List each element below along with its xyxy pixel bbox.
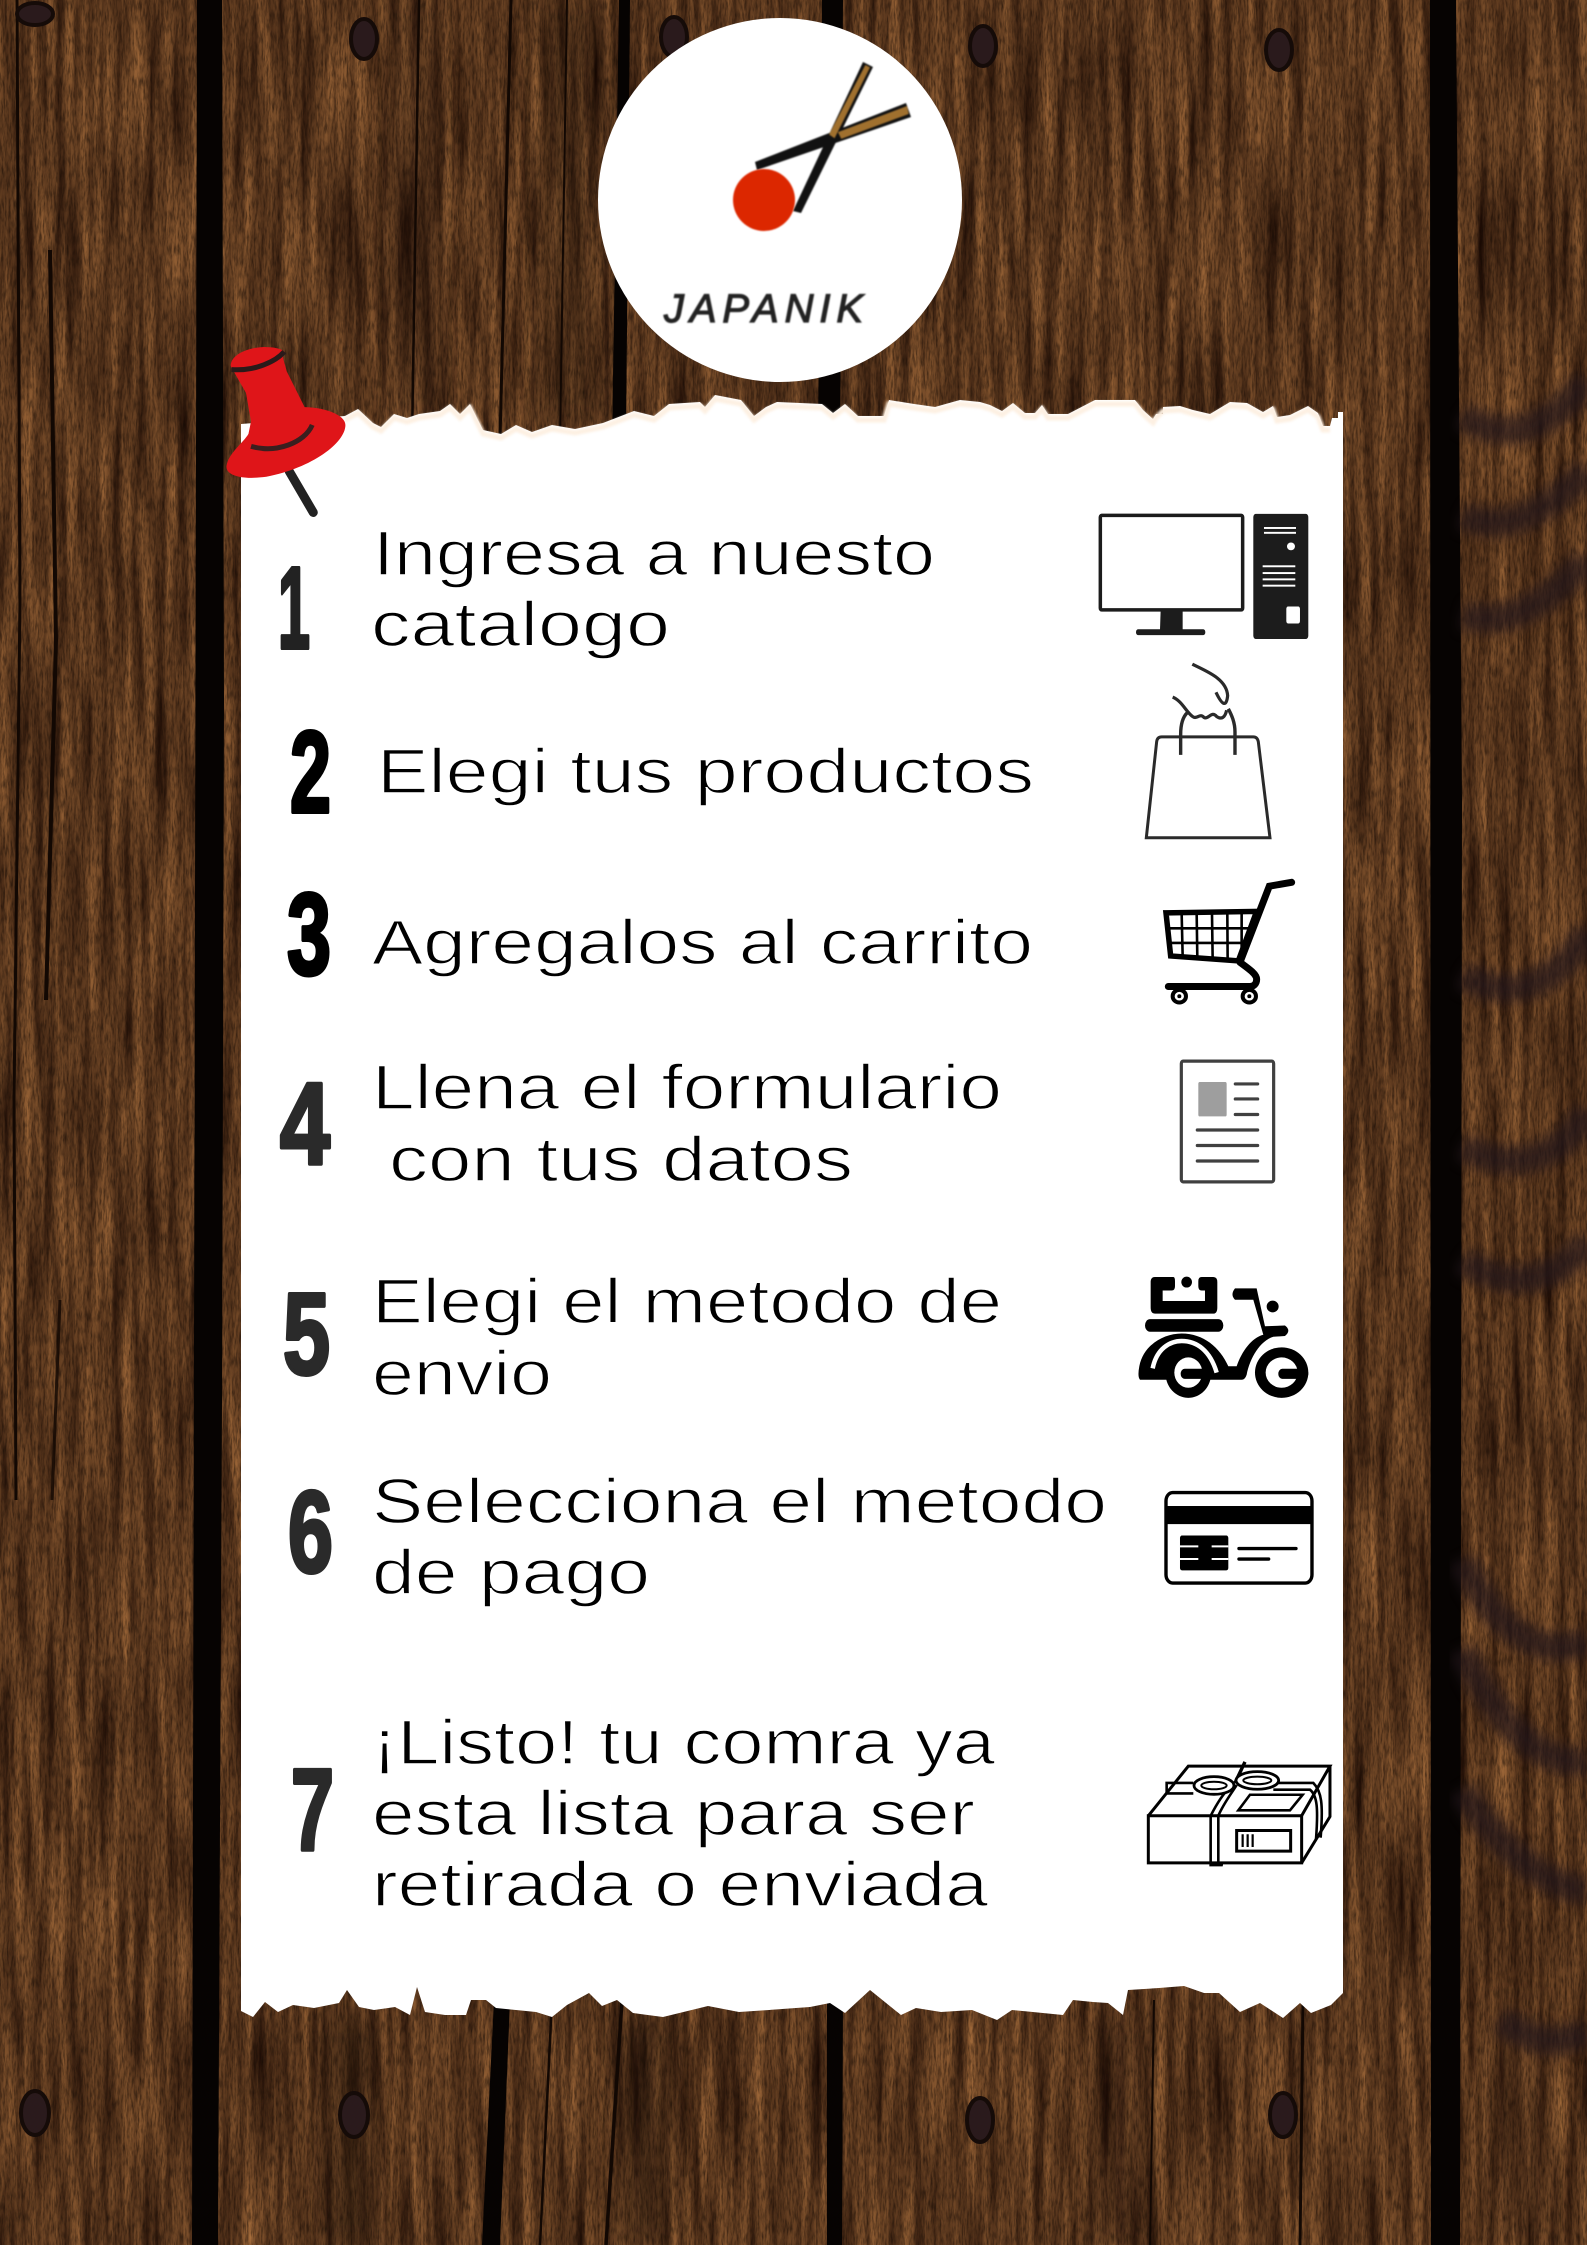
step 1: 1: [278, 543, 310, 673]
step 5: [283, 1267, 1308, 1409]
number 2: 2: [290, 707, 331, 837]
right plank rings: [1462, 380, 1587, 2041]
step 6: [288, 1467, 1312, 1608]
logo badge: [598, 18, 962, 382]
icon: shopping bag with hand: [1146, 664, 1270, 838]
step 1: [278, 514, 1308, 673]
number 3: 3: [287, 869, 331, 999]
step 1 text: [371, 519, 935, 660]
step 6 text: [372, 1467, 1107, 1608]
step 7 text: retirada o enviada: [372, 1850, 989, 1920]
step 4 text: Llena el formulario: [372, 1053, 1002, 1123]
step 2 text: Elegi tus productos: [377, 737, 1034, 807]
step 3 text: Agregalos al carrito: [372, 908, 1033, 978]
step 7 text: esta lista para ser: [372, 1779, 975, 1849]
step 7 text: ¡Listo! tu comra ya: [372, 1708, 996, 1778]
icon: chopsticks: [755, 62, 911, 213]
number 6: 6: [288, 1467, 333, 1597]
brand name: JAPANIK: [663, 287, 865, 331]
step 1 text: Ingresa a nuesto: [373, 519, 935, 589]
icon: red ball: [733, 169, 795, 231]
icon: desktop computer: [1100, 514, 1308, 639]
icon: red push pin: [226, 347, 345, 512]
panel: torn paper sheet: [241, 395, 1343, 2020]
step 7: [291, 1708, 1330, 1920]
number 4: 4: [280, 1059, 330, 1189]
wood knots: [17, 3, 1296, 2142]
step 6 text: Selecciona el metodo: [372, 1467, 1107, 1537]
icon: shopping cart: [1166, 882, 1292, 1003]
icon: form document: [1181, 1061, 1274, 1182]
step 6 text: de pago: [372, 1538, 650, 1608]
step 4 text: con tus datos: [389, 1125, 853, 1195]
icon: wrapped parcel: [1148, 1762, 1330, 1865]
step 4: [280, 1053, 1274, 1195]
step 5 text: Elegi el metodo de: [372, 1267, 1002, 1337]
number 7: 7: [291, 1745, 334, 1875]
step 5 text: envio: [372, 1339, 552, 1409]
step 1 text: catalogo: [371, 590, 670, 660]
step 3: [287, 869, 1292, 1003]
icon: credit card: [1166, 1493, 1312, 1583]
number 5: 5: [283, 1269, 330, 1399]
step 4 text: [372, 1053, 1002, 1195]
step 5 text: [372, 1267, 1002, 1409]
step 7 text: [372, 1708, 996, 1920]
icon: delivery scooter: [1138, 1277, 1308, 1398]
step 2: [290, 664, 1270, 838]
